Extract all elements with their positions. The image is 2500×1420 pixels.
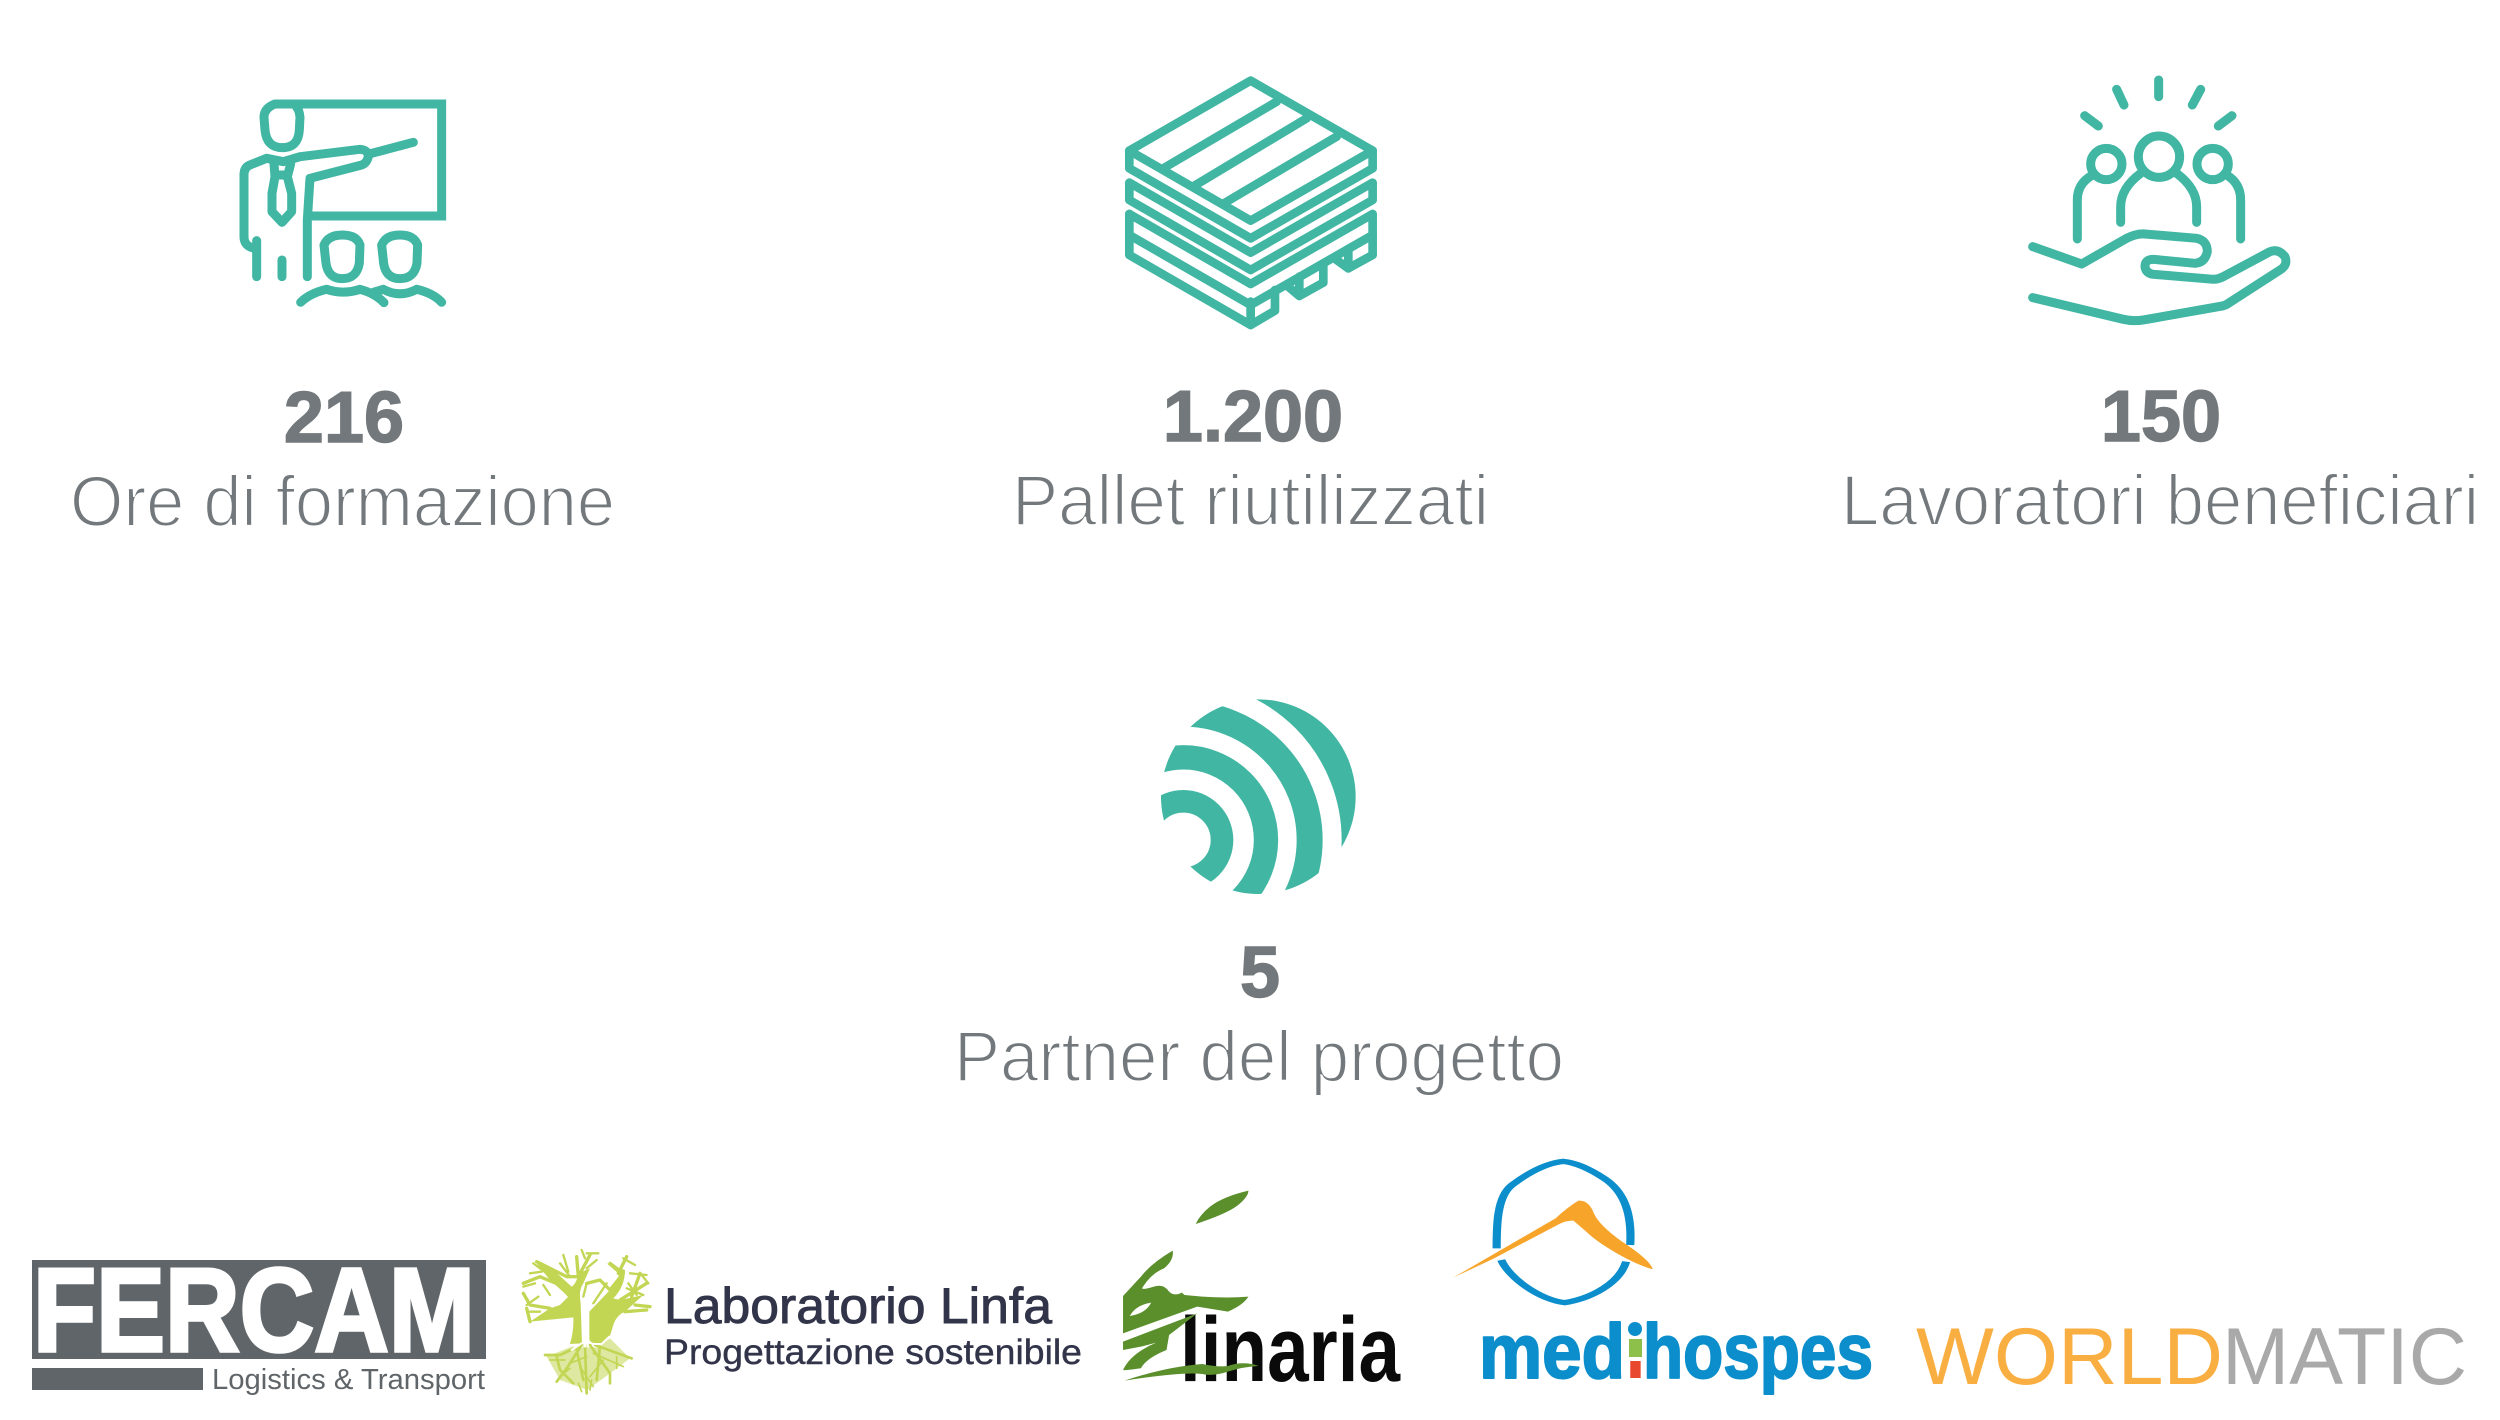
stat panel: ore di formazione bbox=[70, 104, 615, 542]
icon: blue ring and orange roof bbox=[1453, 1161, 1653, 1303]
label: pallet riutilizzati: Pallet riutilizzati bbox=[1012, 462, 1489, 541]
label: partner del progetto: Partner del progetto bbox=[954, 1018, 1564, 1097]
logo: Medihospes bbox=[1453, 1161, 1873, 1395]
logo: Worldmatic: WORLD bbox=[1916, 1312, 2223, 1402]
number: 5: 5 bbox=[1240, 933, 1280, 1013]
logo: Worldmatic: MATIC bbox=[2222, 1312, 2467, 1402]
logo: Linaria: linaria bbox=[1180, 1299, 1401, 1401]
number: 150: 150 bbox=[2101, 377, 2221, 457]
logo: Laboratorio Linfa: Progettazione sostenibile bbox=[664, 1333, 1082, 1372]
logo: Medihospes: i bbox=[1625, 1309, 1646, 1395]
number: 1.200: 1.200 bbox=[1163, 377, 1343, 457]
number: 216: 216 bbox=[284, 378, 404, 458]
stat panel: pallet riutilizzati bbox=[1012, 81, 1489, 541]
logo: Worldmatic bbox=[1916, 1312, 2467, 1402]
label: ore di formazione: Ore di formazione bbox=[70, 463, 615, 542]
logo: Medihospes: hospes bbox=[1643, 1309, 1873, 1395]
icon: tree with roots bbox=[523, 1250, 650, 1393]
stat panel: lavoratori beneficiari bbox=[1841, 80, 2479, 541]
stat panel: partner del progetto bbox=[960, 699, 1560, 1095]
label: lavoratori beneficiari: Lavoratori beneficiari bbox=[1841, 462, 2479, 541]
icon: hand holding people bbox=[2033, 80, 2286, 321]
logo: Medihospes: med bbox=[1479, 1309, 1625, 1395]
logo: FERCAM: Logistics & Transport bbox=[212, 1364, 485, 1396]
icon: green leaves bbox=[1123, 1191, 1259, 1381]
icon: striped globe bbox=[1161, 699, 1356, 894]
logo: Laboratorio Linfa bbox=[523, 1250, 1082, 1393]
logo: FERCAM: FERCAM bbox=[33, 1244, 475, 1377]
logo: Laboratorio Linfa: Laboratorio Linfa bbox=[664, 1278, 1052, 1334]
icon: pallet stack bbox=[1129, 81, 1373, 325]
icon: trainer at board with audience bbox=[244, 104, 442, 303]
logo: Linaria bbox=[1123, 1191, 1401, 1401]
